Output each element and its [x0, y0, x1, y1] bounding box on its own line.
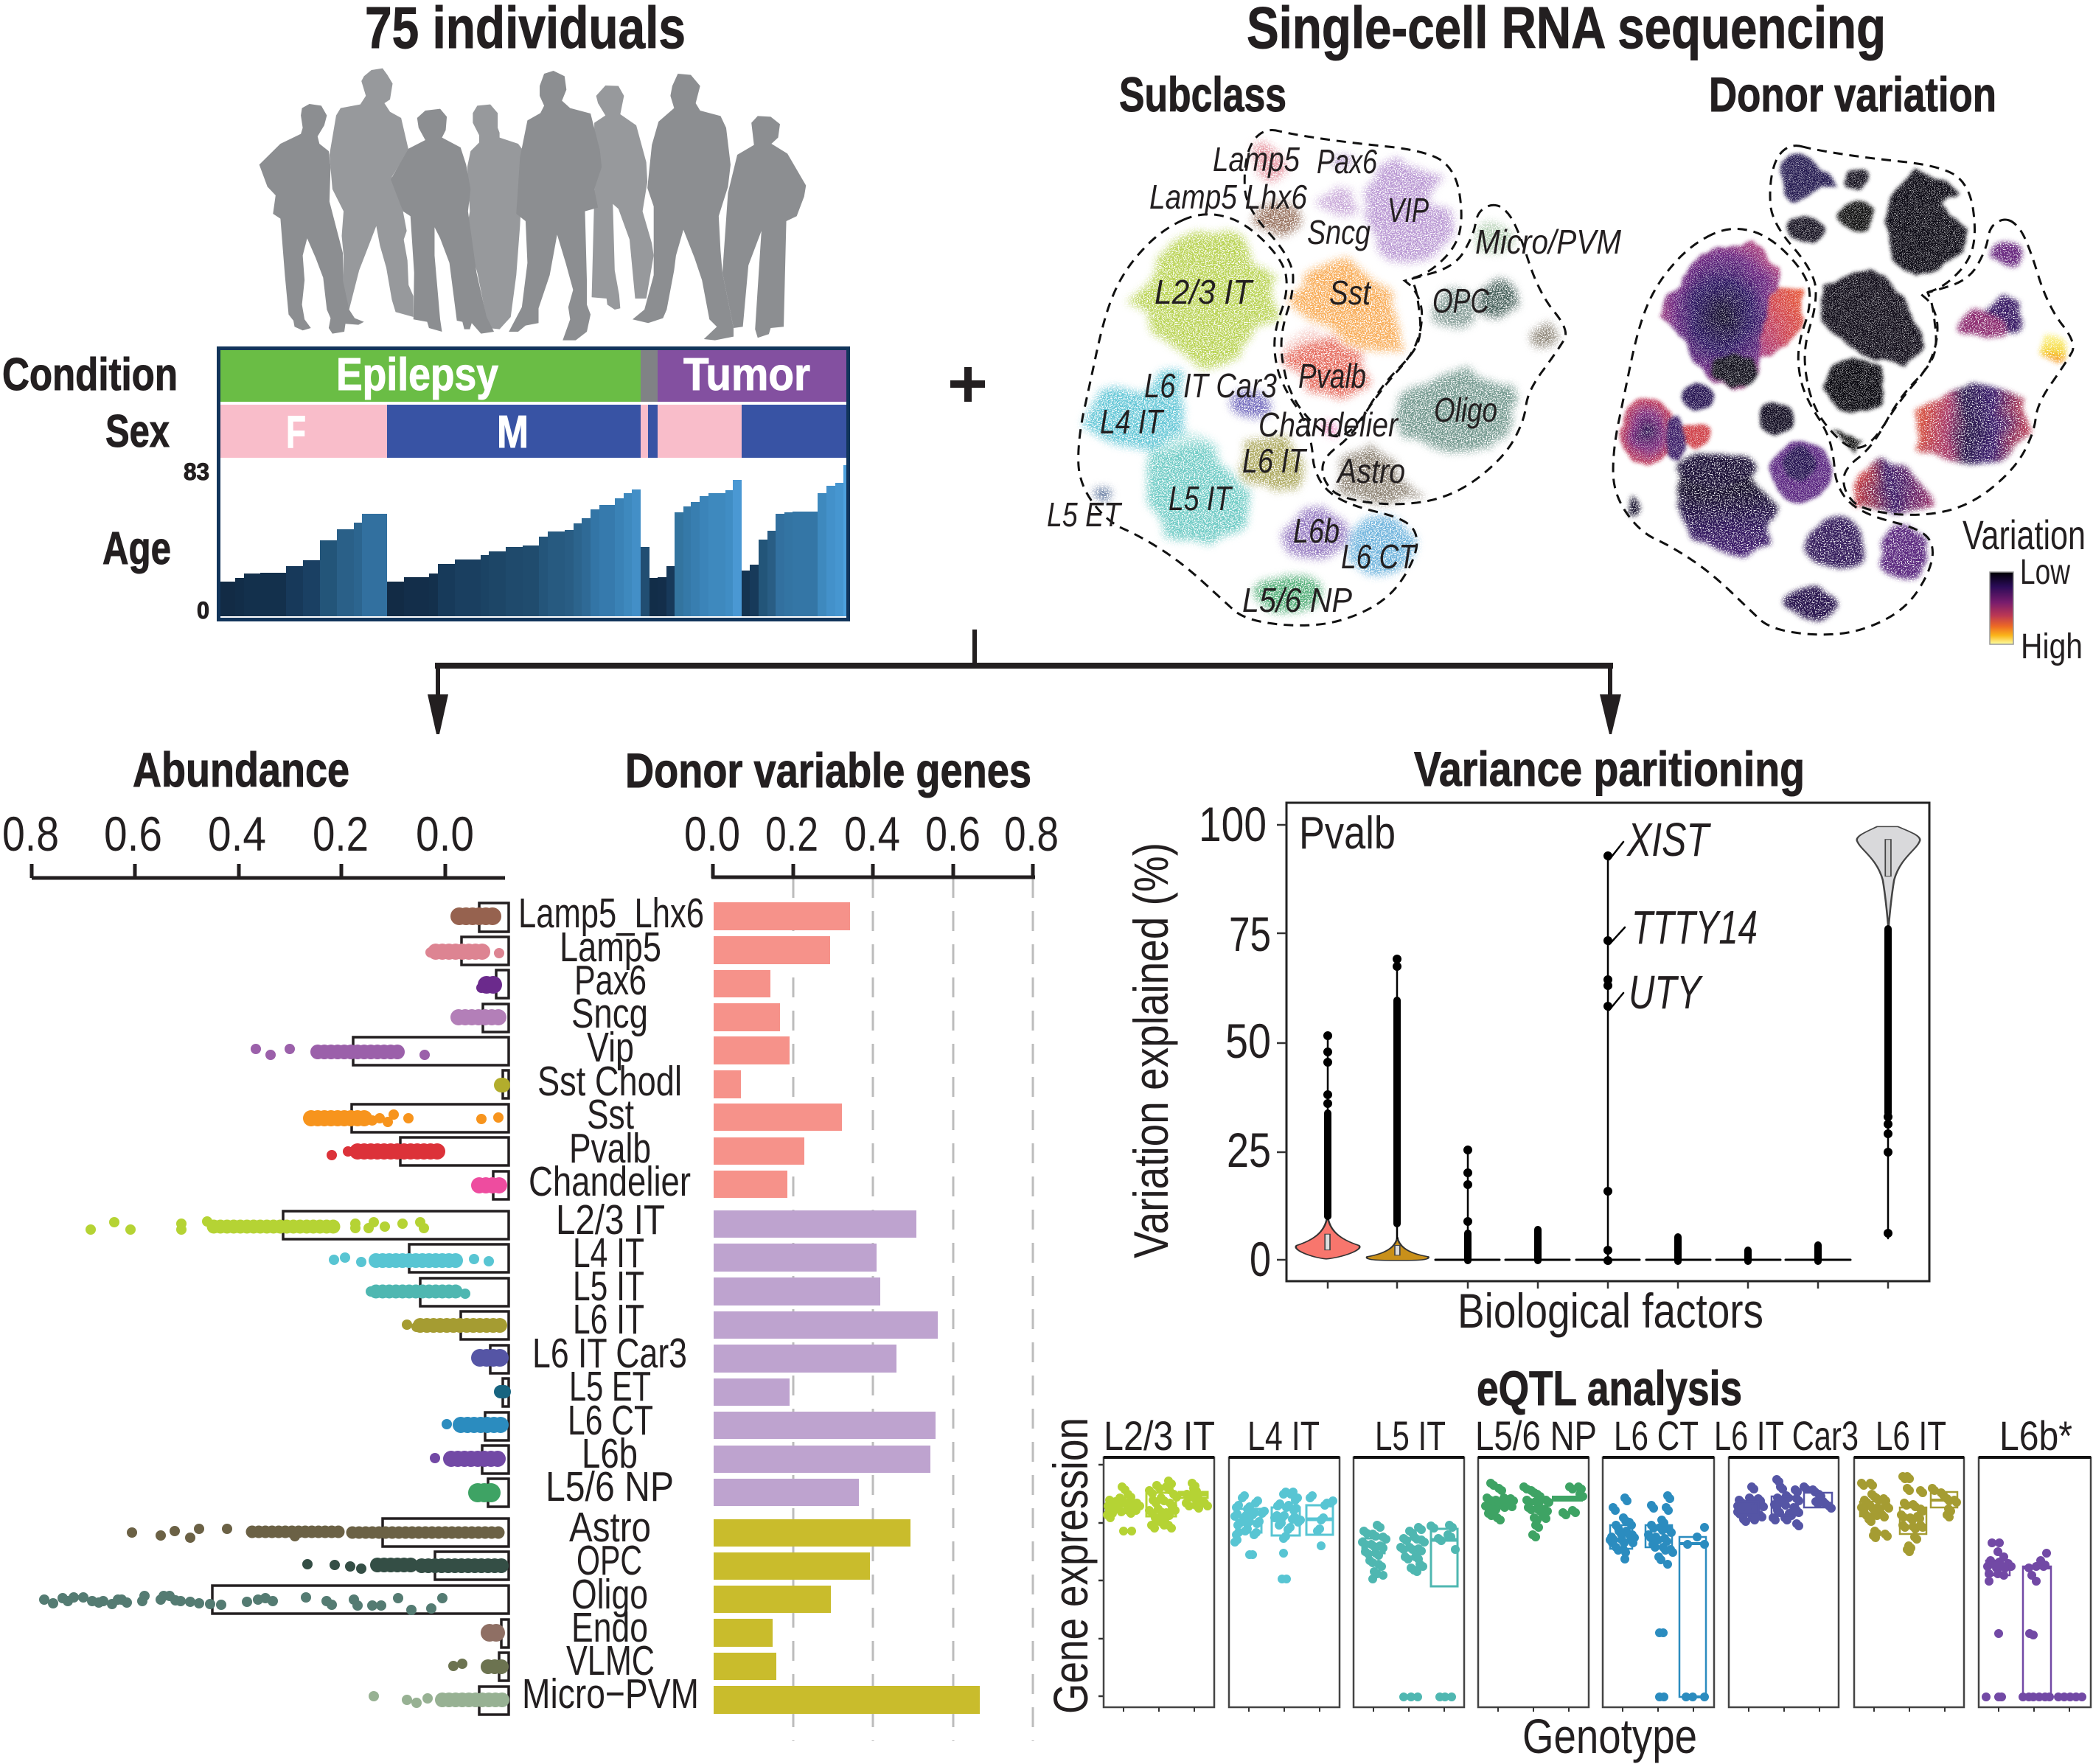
row labels: cell subclasses: Astro: [569, 1504, 651, 1551]
dashed class outlines: [1079, 130, 1566, 625]
subclass labels: L5 IT: [1169, 479, 1233, 517]
legend: variation colour scale: [1963, 512, 2086, 666]
row labels: cell subclasses: L5 IT: [573, 1263, 644, 1310]
subclass labels: OPC: [1432, 282, 1490, 320]
facet: L6 IT: L6 IT: [1876, 1412, 1946, 1459]
y axis labels: 25: [1227, 1123, 1271, 1177]
heading: Subclass: Subclass: [1119, 67, 1286, 122]
genes axis: 0.2: [765, 806, 818, 861]
outlier dots and whiskers: [1328, 842, 1888, 1261]
label: Epilepsy: Epilepsy: [336, 349, 498, 400]
label: F: F: [286, 407, 306, 458]
subclass labels: Sncg: [1307, 213, 1371, 251]
subclass labels: Lamp5 Lhx6: [1149, 178, 1307, 216]
neuron inhibitory bars: [714, 902, 850, 1198]
dashed class outlines: [1613, 146, 2073, 635]
genes axis: [684, 806, 1059, 878]
x axis title: Genotype: Genotype: [1522, 1709, 1697, 1763]
row labels: cell subclasses: Sst: [587, 1091, 634, 1138]
age bars: [220, 465, 847, 616]
facet: L6 CT: L6 CT: [1614, 1412, 1699, 1459]
subclass labels: Astro: [1335, 452, 1405, 490]
heading: Abundance: Abundance: [133, 742, 349, 797]
sex bar: [220, 405, 847, 458]
subclass labels: Micro/PVM: [1475, 223, 1622, 261]
subclass labels: Pvalb: [1298, 357, 1366, 395]
row labels: cell subclasses: L6 CT: [568, 1397, 653, 1444]
x axis title: Biological factors: [1458, 1283, 1763, 1338]
subclass labels: Chandelier: [1258, 405, 1399, 444]
heading: Variance paritioning: Variance paritioning: [1414, 742, 1805, 796]
icon: group silhouette: [260, 69, 806, 341]
subclass labels: Lamp5: [1213, 140, 1300, 178]
arrow: branching connector: [428, 630, 1621, 734]
subclass labels: Pax6: [1317, 142, 1377, 181]
row labels: cell subclasses: L5 ET: [569, 1363, 651, 1410]
label: Condition: Condition: [2, 349, 178, 400]
heading: Donor variable genes: Donor variable genes: [625, 743, 1031, 798]
facet: L6b*: [1979, 1412, 2091, 1712]
row labels: cell subclasses: L6 IT Car3: [532, 1330, 687, 1377]
panel: Donor variable genes: [625, 743, 1059, 1741]
facet: L5 IT: L5 IT: [1375, 1412, 1446, 1459]
age min: 0: 0: [197, 597, 209, 624]
row labels: cell subclasses: L2/3 IT: [556, 1196, 665, 1244]
panel: Variance partitioning: [1124, 742, 1929, 1338]
subclass labels: L6 IT: [1242, 442, 1307, 480]
row labels: cell subclasses: Sncg: [571, 990, 648, 1037]
panel: Abundance: [2, 742, 509, 1715]
panel: subclass UMAP: [1047, 130, 1622, 625]
panel: donor variation UMAP: [1613, 146, 2073, 635]
panel: eQTL analysis: [1043, 1361, 2091, 1763]
neuron excitatory bars: [714, 1210, 938, 1506]
label: Sex: Sex: [105, 406, 170, 457]
upper donor clusters: [1620, 154, 1966, 501]
label: M: M: [497, 407, 529, 458]
facet: L6 CT: [1603, 1412, 1714, 1712]
y axis title: Gene expression: Gene expression: [1043, 1418, 1098, 1714]
violins: [1296, 826, 1920, 1261]
y axis labels: [1199, 797, 1271, 1286]
abundance axis: 0.2: [313, 806, 369, 861]
row labels: cell subclasses: VLMC: [566, 1637, 655, 1684]
facet: L6 IT: [1854, 1412, 1964, 1712]
y axis title: Variation explained (%): [1124, 843, 1178, 1258]
subclass labels: Oligo: [1434, 391, 1497, 429]
panel: donor metadata chart: [2, 348, 848, 624]
y axis labels: 75: [1229, 907, 1271, 961]
lower donor clusters: [1630, 239, 2067, 620]
heading: eQTL analysis: eQTL analysis: [1477, 1361, 1742, 1415]
subclass labels: L5 ET: [1047, 495, 1122, 534]
row labels: cell subclasses: Lamp5: [560, 924, 661, 971]
abundance axis: 0.4: [208, 806, 266, 861]
facet: L4 IT: [1229, 1412, 1340, 1712]
subclass labels: [1047, 140, 1622, 619]
panel: 75 individuals: [260, 0, 806, 341]
row labels: cell subclasses: Endo: [571, 1604, 648, 1651]
abundance dot strips: [44, 916, 504, 1703]
y axis labels: 50: [1225, 1014, 1271, 1068]
subclass labels: VIP: [1387, 191, 1429, 229]
abundance box outlines: [212, 903, 509, 1715]
label: Pvalb: Pvalb: [1299, 808, 1396, 859]
label: Tumor: Tumor: [683, 349, 810, 400]
row labels: cell subclasses: Lamp5_Lhx6: [518, 890, 704, 937]
facet: L5 IT: [1354, 1412, 1464, 1712]
legend high: High: [2021, 627, 2083, 666]
row labels: cell subclasses: L6b: [582, 1430, 638, 1477]
plot frame: [1286, 803, 1929, 1281]
gene label: TTTY14: TTTY14: [1631, 901, 1758, 954]
facet: L4 IT: L4 IT: [1247, 1412, 1320, 1459]
condition bar: [220, 350, 847, 402]
subclass labels: L6 CT: [1341, 537, 1417, 576]
abundance axis: 0.0: [416, 806, 474, 861]
facet: L6 IT Car3: [1714, 1412, 1859, 1712]
row labels: cell subclasses: Pax6: [574, 957, 647, 1004]
abundance axis: 0.6: [104, 806, 162, 861]
facet: L2/3 IT: [1104, 1412, 1215, 1712]
facet: L5/6 NP: L5/6 NP: [1475, 1412, 1597, 1459]
subclass labels: L6 IT Car3: [1144, 366, 1277, 405]
row labels: cell subclasses: L4 IT: [573, 1230, 644, 1277]
colour bar: [1990, 572, 2013, 644]
subclass labels: L5/6 NP: [1242, 581, 1352, 619]
facet: L6 IT Car3: L6 IT Car3: [1714, 1412, 1859, 1459]
row labels: cell subclasses: Sst Chodl: [537, 1058, 682, 1105]
non-neuronal bars: [714, 1519, 980, 1714]
legend low: Low: [2020, 553, 2070, 592]
age max: 83: 83: [184, 459, 209, 485]
y ticks: [1098, 1465, 1104, 1696]
row labels: cell subclasses: Chandelier: [529, 1158, 691, 1205]
row labels: cell subclasses: Micro−PVM: [522, 1670, 699, 1718]
y axis ticks: [1277, 825, 1888, 1289]
genes axis: 0.8: [1004, 806, 1059, 861]
row labels: cell subclasses: Vip: [587, 1024, 634, 1071]
facet: L2/3 IT: L2/3 IT: [1104, 1412, 1215, 1459]
y axis labels: 100: [1199, 797, 1267, 851]
row labels: cell subclasses: Pvalb: [569, 1125, 651, 1172]
icon: plus sign: [950, 367, 985, 402]
gene label: UTY: UTY: [1629, 966, 1703, 1019]
facet: L5/6 NP: [1475, 1412, 1597, 1712]
genes axis: 0.6: [925, 806, 981, 861]
subclass labels: L2/3 IT: [1155, 273, 1254, 311]
gene label: XIST: XIST: [1626, 813, 1711, 866]
heading: Donor variation: Donor variation: [1709, 67, 1996, 122]
genes axis: 0.0: [684, 806, 740, 861]
subclass labels: Sst: [1329, 273, 1372, 312]
genes axis: 0.4: [844, 806, 900, 861]
y axis labels: 0: [1250, 1232, 1271, 1286]
row labels: cell subclasses: Oligo: [571, 1571, 648, 1618]
subclass labels: L6b: [1293, 512, 1340, 550]
facet: L6b*: L6b*: [1999, 1412, 2072, 1459]
row labels: cell subclasses: L5/6 NP: [546, 1463, 674, 1510]
abundance axis: [2, 806, 505, 878]
row labels: cell subclasses: L6 IT: [573, 1296, 644, 1343]
abundance axis: 0.8: [2, 806, 59, 861]
label: Age: Age: [102, 523, 171, 574]
row labels: cell subclasses: [518, 890, 704, 1718]
row labels: cell subclasses: OPC: [577, 1537, 642, 1584]
chart frame: [218, 348, 848, 619]
subclass labels: L4 IT: [1100, 402, 1164, 441]
